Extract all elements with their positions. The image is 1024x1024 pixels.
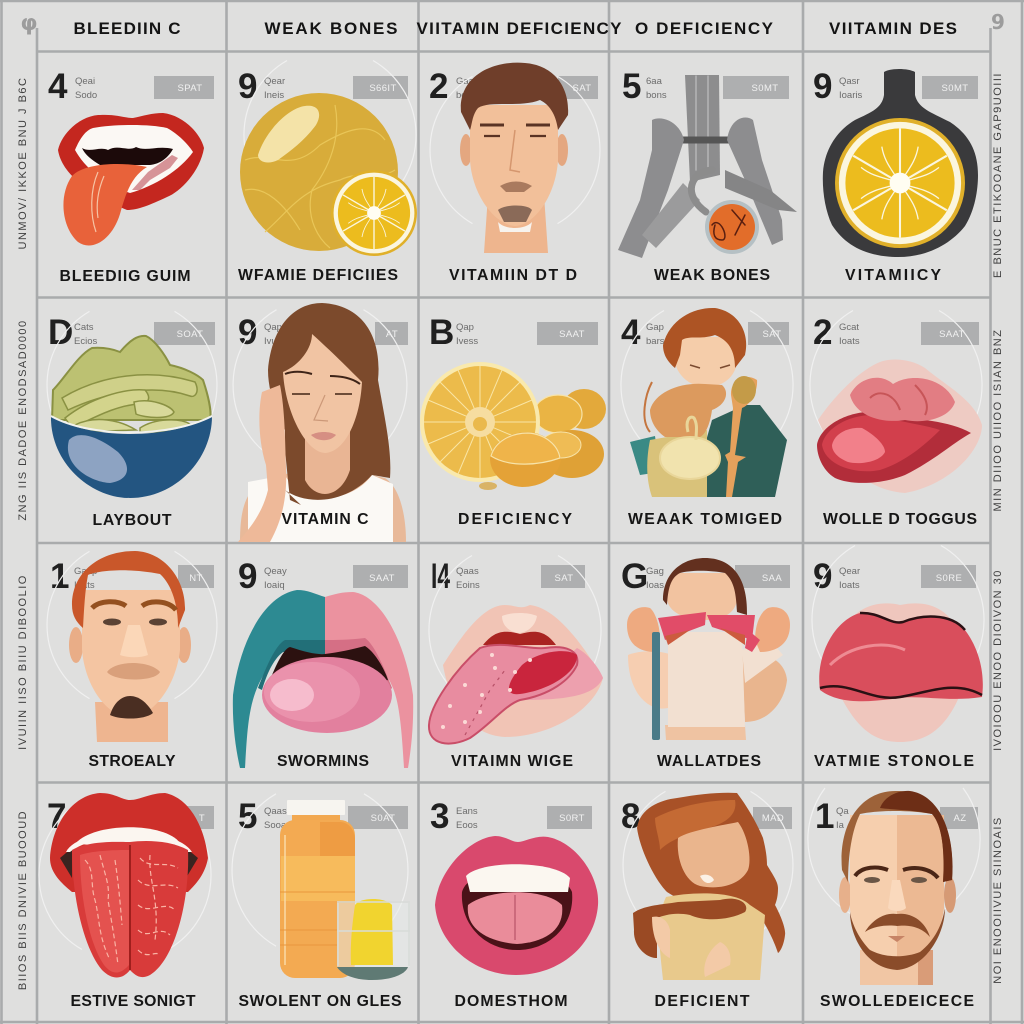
small note: Qeay bbox=[264, 566, 287, 577]
small note: Ineis bbox=[264, 90, 284, 101]
small note: Qaas bbox=[456, 566, 479, 577]
label: LAYBOUT bbox=[92, 512, 172, 529]
small note: Qa bbox=[836, 806, 849, 817]
tag: S0RT bbox=[559, 813, 585, 824]
small note: Qap bbox=[264, 322, 282, 333]
number: G bbox=[621, 557, 648, 596]
tag bbox=[558, 76, 598, 99]
small note: Qaas bbox=[264, 806, 287, 817]
tag bbox=[940, 807, 978, 829]
tag: S0RE bbox=[936, 573, 962, 584]
number: 4 bbox=[621, 313, 641, 352]
small note: Gap bbox=[646, 322, 664, 333]
number: 5 bbox=[238, 797, 257, 836]
small note: Sodo bbox=[75, 90, 97, 101]
icon: dark flask with lemon bbox=[823, 69, 978, 257]
tag: AZ bbox=[954, 813, 966, 824]
tag bbox=[748, 322, 789, 345]
icon: swollen lips bbox=[819, 603, 983, 742]
panel: citrus and nuts bbox=[420, 313, 606, 528]
number: 3 bbox=[430, 797, 449, 836]
side label row 3 right: IVOIOOU ENOO DIOIVON 30 bbox=[992, 569, 1004, 751]
icon: top left corner glyph: φ bbox=[20, 11, 38, 36]
small note: 6aa bbox=[646, 76, 662, 87]
decorative arcs bbox=[232, 794, 408, 946]
tag bbox=[922, 76, 978, 99]
small note: Eans bbox=[456, 806, 478, 817]
label: VITAMIN C bbox=[282, 511, 368, 528]
icon: open mouth with tongue bbox=[58, 113, 204, 246]
decorative arcs bbox=[47, 551, 217, 699]
small note: Ioats bbox=[839, 580, 860, 591]
label: VITAMIICY bbox=[845, 267, 941, 284]
small note: Gcat bbox=[839, 322, 859, 333]
number: 7 bbox=[47, 797, 66, 836]
icon: man portrait bbox=[460, 63, 568, 253]
panel: teal and pink tongue bbox=[233, 557, 413, 770]
label: WEAK BONES bbox=[654, 267, 770, 284]
label: SWOLENT ON GLES bbox=[238, 993, 402, 1010]
tag bbox=[178, 565, 214, 588]
tag: NT bbox=[189, 573, 203, 584]
panel: man with moustache bbox=[808, 788, 980, 1010]
header row bbox=[74, 19, 957, 38]
icon: open pink mouth bbox=[435, 836, 598, 975]
panel: bowl of greens bbox=[47, 311, 217, 529]
tag: SAAT bbox=[369, 573, 395, 584]
tag: S0AT bbox=[371, 813, 395, 824]
number: 9 bbox=[238, 557, 257, 596]
decorative arcs bbox=[47, 311, 217, 459]
number: 2 bbox=[429, 67, 448, 106]
small note: Qasr bbox=[839, 76, 860, 87]
small note: Qeai bbox=[75, 76, 95, 87]
panel: vitamin sphere with lemon bbox=[238, 60, 417, 284]
tag bbox=[753, 807, 792, 829]
tag: SOAT bbox=[177, 329, 203, 340]
label: SWOLLEDEICECE bbox=[820, 993, 974, 1010]
panel: weak bones bbox=[618, 67, 797, 284]
heading: column 4: O DEFICIENCY bbox=[635, 19, 774, 38]
side label row 4 right: NOI ENOOIIVUE SIINOAIS bbox=[992, 816, 1004, 984]
tag bbox=[353, 565, 408, 588]
number: 9 bbox=[238, 67, 257, 106]
decorative arcs bbox=[812, 546, 984, 694]
tag bbox=[921, 565, 976, 588]
side label row 1: UNMOV/ IKKOE BNU J B6C bbox=[17, 77, 29, 249]
label: WOLLE D TOGGUS bbox=[823, 511, 977, 528]
tag: SAAT bbox=[939, 329, 965, 340]
small note: Gaap bbox=[74, 566, 97, 577]
label: WALLATDES bbox=[657, 753, 761, 770]
small note: bons bbox=[456, 90, 477, 101]
tag: MAD bbox=[762, 813, 784, 824]
tag bbox=[723, 76, 789, 99]
panel: bleeding gums bbox=[48, 67, 214, 285]
icon: woman with long hair bbox=[633, 793, 785, 980]
panel: pink mouth bbox=[430, 797, 598, 1010]
decorative arcs bbox=[430, 76, 600, 224]
icon: red tongue with lips bbox=[50, 793, 208, 978]
tag bbox=[154, 322, 215, 345]
tag: AT bbox=[386, 329, 398, 340]
number: 2 bbox=[813, 313, 832, 352]
tag: SAAT bbox=[559, 329, 585, 340]
decorative arcs bbox=[810, 310, 982, 460]
icon: inflamed tongue bbox=[817, 360, 982, 493]
panel: man face bbox=[429, 63, 600, 284]
icon: man with moustache and beard bbox=[839, 791, 956, 985]
number: 1 bbox=[815, 797, 834, 836]
small note: bons bbox=[646, 90, 667, 101]
number: 9 bbox=[238, 313, 257, 352]
small note: Sooa bbox=[264, 820, 287, 831]
number: 5 bbox=[622, 67, 641, 106]
tag bbox=[547, 806, 592, 829]
number: 8 bbox=[621, 797, 640, 836]
label: ESTIVE SONIGT bbox=[70, 993, 196, 1010]
label: DEFICIENCY bbox=[458, 511, 572, 528]
panel: person with glasses bbox=[621, 557, 790, 770]
tag bbox=[537, 322, 598, 345]
icon: citrus slice and golden slices bbox=[420, 362, 606, 490]
label: STROEALY bbox=[88, 753, 176, 770]
small note: Ivus bbox=[264, 336, 282, 347]
small note: Ioaiq bbox=[264, 580, 285, 591]
heading: column 1: BLEEDIIN C bbox=[74, 19, 180, 38]
tag bbox=[541, 565, 585, 588]
icon: person holding glasses bbox=[627, 558, 790, 740]
label: SWORMINS bbox=[277, 753, 369, 770]
small note: Ioaris bbox=[839, 90, 862, 101]
icon: top right corner glyph: 9 bbox=[991, 10, 1005, 34]
small note: Eoins bbox=[456, 580, 480, 591]
number: 9 bbox=[813, 67, 832, 106]
label: VITAMIIN DT D bbox=[449, 267, 577, 284]
right side labels bbox=[992, 72, 1004, 984]
small note: Ioas bbox=[646, 580, 664, 591]
heading: column 5: VIITAMIN DES bbox=[829, 19, 957, 38]
tag bbox=[353, 76, 408, 99]
tag: S0MT bbox=[942, 83, 968, 94]
tag bbox=[154, 76, 214, 99]
number: B bbox=[429, 313, 454, 352]
tag: S66IT bbox=[369, 83, 397, 94]
tag bbox=[348, 806, 408, 829]
small note: Gag bbox=[646, 566, 664, 577]
decorative arcs bbox=[233, 310, 407, 460]
label: WFAMIE DEFICIIES bbox=[238, 267, 398, 284]
number: 9 bbox=[813, 557, 832, 596]
icon: teal and pink mouth bbox=[233, 590, 413, 768]
number: 4 bbox=[48, 67, 68, 106]
side label row 4: BIIOS BIIS DNIVIE BUOOUD bbox=[17, 810, 29, 990]
side label row 1 right: E BNUC ETIKOOANE GAP9UOIII bbox=[992, 72, 1004, 278]
tag: SAT bbox=[763, 329, 781, 340]
decorative arcs bbox=[244, 60, 416, 210]
small note: Eoos bbox=[456, 820, 478, 831]
number: 1 bbox=[50, 557, 69, 596]
label: BLEEDIIG GUIM bbox=[60, 268, 190, 285]
tag: S0MT bbox=[752, 83, 778, 94]
panel: woman with headache bbox=[233, 303, 408, 542]
decorative arcs bbox=[429, 556, 601, 704]
tag: SAA bbox=[762, 573, 782, 584]
icon: man with orange hair and goatee bbox=[69, 551, 191, 742]
tag bbox=[735, 565, 790, 588]
panel: child with food bbox=[621, 308, 793, 528]
number: D bbox=[48, 313, 73, 352]
tag: SAT bbox=[573, 83, 591, 94]
label: VITAIMN WIGE bbox=[451, 753, 573, 770]
panel: red textured tongue bbox=[39, 793, 214, 1010]
tag bbox=[183, 806, 214, 829]
label: DOMESTHOM bbox=[454, 993, 568, 1010]
icon: bones illustration bbox=[618, 75, 797, 258]
panel: spotted tongue bbox=[429, 556, 603, 770]
number: I4 bbox=[431, 557, 450, 596]
small note: Cats bbox=[74, 322, 94, 333]
icon: woman portrait bbox=[238, 303, 406, 542]
decorative arcs bbox=[808, 788, 980, 914]
small note: Ecios bbox=[74, 336, 97, 347]
side label row 2 right: MIN DIIOO UIIOO ISIAN BNZ bbox=[992, 329, 1004, 511]
small note: Qear bbox=[264, 76, 285, 87]
tag bbox=[921, 322, 979, 345]
label: WEAAK TOMIGED bbox=[628, 511, 782, 528]
small note: Qear bbox=[839, 566, 860, 577]
icon: child with food items bbox=[630, 308, 787, 497]
small note: Ioats bbox=[839, 336, 860, 347]
side label row 3: IVUIIN IISO BIIU DIBOOLIO bbox=[17, 574, 29, 750]
label: VATMIE STONOLE bbox=[814, 753, 974, 770]
side label row 2: ZNG IIS DADOE ENODSAD0000 bbox=[17, 319, 29, 521]
decorative arcs bbox=[39, 800, 211, 950]
panel: lemon in dark pot bbox=[813, 67, 978, 284]
icon: orange bottle and glass bbox=[280, 800, 410, 980]
small note: Qap bbox=[456, 322, 474, 333]
tag: T bbox=[199, 813, 205, 824]
panel: man with orange hair bbox=[47, 551, 217, 770]
panel: woman with long red hair bbox=[621, 791, 793, 1010]
tag: SPAT bbox=[177, 83, 203, 94]
heading: column 3: VIITAMIN DEFICIENCY bbox=[416, 19, 622, 38]
small note: bars bbox=[646, 336, 665, 347]
label: DEFICIENT bbox=[654, 993, 750, 1010]
decorative arcs bbox=[621, 310, 793, 460]
icon: bowl of sliced greens bbox=[51, 336, 212, 498]
icon: golden sphere and lemon bbox=[240, 93, 417, 256]
small note: Ia bbox=[836, 820, 845, 831]
heading: column 2: WEAK BONES bbox=[264, 19, 398, 38]
panel: swollen tongue bbox=[810, 310, 982, 528]
tag bbox=[375, 322, 408, 345]
panel: bottle and glass bbox=[232, 794, 410, 1010]
small note: Ioats bbox=[74, 580, 95, 591]
panel: red lips bbox=[812, 546, 984, 770]
small note: Gaar bbox=[456, 76, 477, 87]
small note: Ivess bbox=[456, 336, 478, 347]
left side labels bbox=[17, 77, 29, 990]
icon: mouth with spotted tongue bbox=[429, 605, 603, 744]
tag: SAT bbox=[555, 573, 573, 584]
decorative arcs bbox=[623, 791, 793, 939]
